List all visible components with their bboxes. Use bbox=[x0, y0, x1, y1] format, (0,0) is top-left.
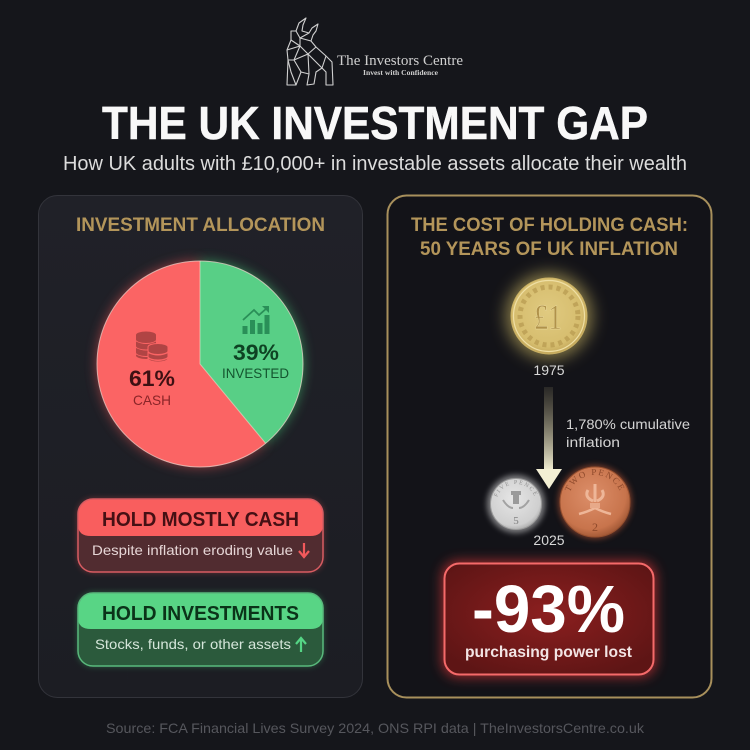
icon: copper two pence coin: 2 bbox=[592, 520, 598, 534]
panel: cost of holding cash bbox=[386, 194, 712, 698]
label: 2025: 2025 bbox=[533, 532, 565, 548]
icon: silver five pence coin bbox=[484, 472, 548, 536]
annotation: cumulative inflation: inflation bbox=[566, 434, 620, 450]
subtitle: How UK adults with £10,000+ in investable assets allocate their wealth bbox=[63, 153, 687, 175]
label: 39%: 39% bbox=[233, 340, 279, 365]
source line: Source: FCA Financial Lives Survey 2024, ONS RPI data | TheInvestorsCentre.co.uk bbox=[106, 720, 645, 736]
card: hold investments bbox=[77, 592, 324, 667]
panel heading: cost of holding cash: THE COST OF HOLDING CASH: bbox=[411, 214, 688, 236]
annotation: cumulative inflation: 1,780% cumulative bbox=[566, 416, 690, 432]
icon: copper two pence coin bbox=[554, 462, 636, 542]
label: 1975: 1975 bbox=[533, 362, 565, 378]
callout: purchasing power lost bbox=[442, 561, 656, 677]
card: hold mostly cash bbox=[77, 498, 324, 573]
title: THE UK INVESTMENT GAP bbox=[102, 97, 648, 149]
icon: gold one pound coin bbox=[506, 273, 592, 359]
label: invested: INVESTED bbox=[222, 365, 289, 381]
panel: investment allocation bbox=[38, 196, 362, 698]
logo name: The Investors Centre bbox=[337, 53, 463, 69]
icon: silver five pence coin: 5 bbox=[513, 515, 519, 527]
arrow: down bbox=[299, 543, 309, 557]
icon: copper two pence coin: TWO PENCE bbox=[564, 469, 624, 491]
logo: The Investors Centre bbox=[287, 18, 463, 85]
icon: silver five pence coin: FIVE PENCE bbox=[494, 480, 538, 497]
arrow: decline over time bbox=[536, 387, 562, 489]
card text: Stocks, funds, or other assets bbox=[95, 636, 291, 652]
annotation: cumulative inflation bbox=[566, 416, 690, 450]
card heading: HOLD INVESTMENTS bbox=[102, 603, 299, 625]
panel heading: cost of holding cash: 50 YEARS OF UK INFLATION bbox=[420, 238, 678, 260]
logo tagline: Invest with Confidence bbox=[363, 68, 439, 77]
panel heading: cost of holding cash bbox=[411, 214, 688, 260]
arrow: up bbox=[296, 638, 306, 652]
pie chart: cash vs invested bbox=[97, 261, 303, 467]
icon: rising bar chart bbox=[242, 306, 270, 334]
icon: geometric bull bbox=[287, 18, 333, 85]
panel heading: investment allocation: INVESTMENT ALLOCATION bbox=[76, 214, 325, 236]
icon: gold one pound coin: £1 bbox=[534, 297, 562, 337]
callout number: -93% bbox=[472, 572, 625, 647]
callout text: purchasing power lost bbox=[465, 644, 633, 661]
card heading: HOLD MOSTLY CASH bbox=[102, 509, 299, 531]
label: 61%: 61% bbox=[129, 366, 175, 391]
label: cash: CASH bbox=[133, 392, 171, 408]
icon: coin stacks bbox=[136, 332, 168, 362]
card text: Despite inflation eroding value bbox=[92, 542, 293, 558]
